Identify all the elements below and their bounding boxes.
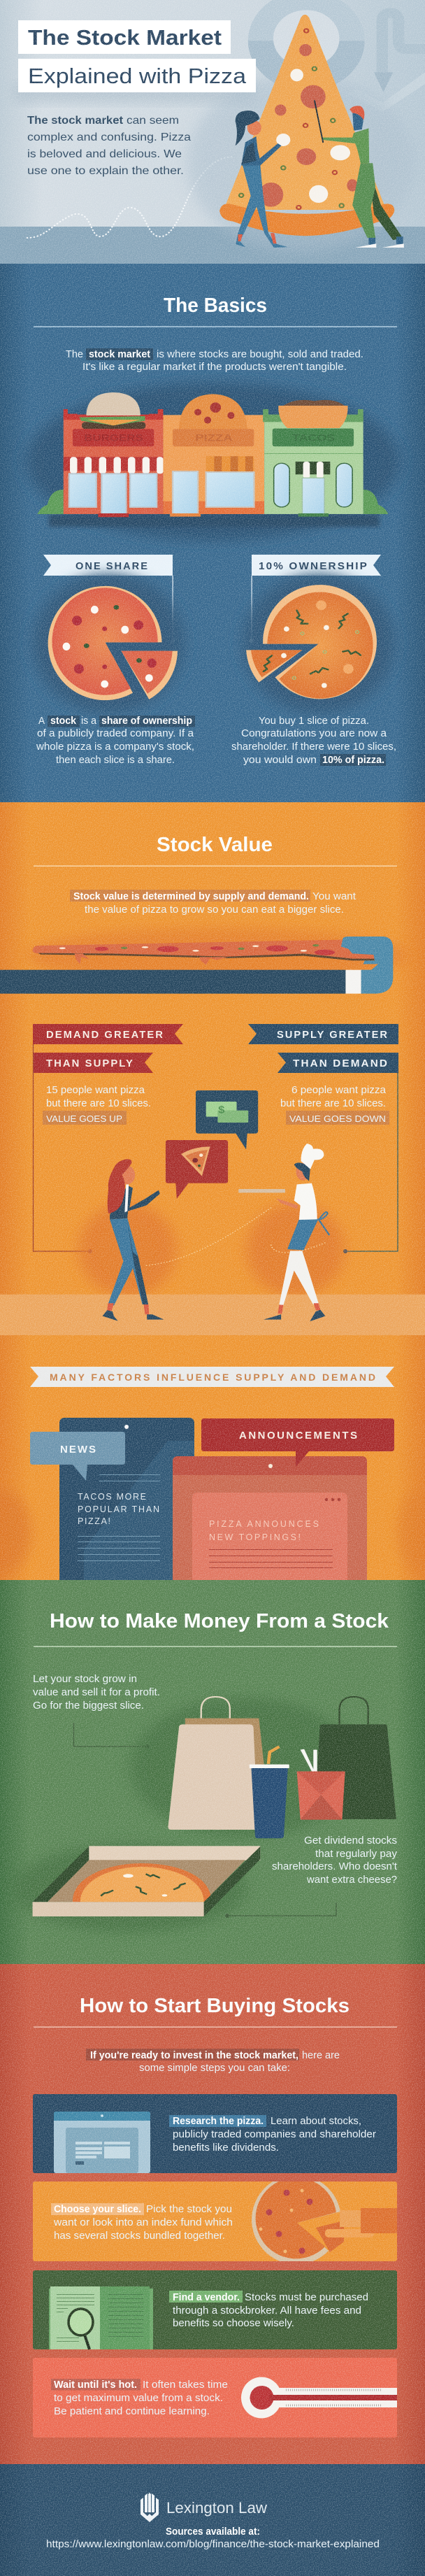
icon: browser xyxy=(54,2112,150,2173)
intro: stock market definition: The xyxy=(66,349,83,360)
icon: thermometer xyxy=(241,2377,397,2419)
banner: supply greater than demand xyxy=(248,1024,398,1253)
intro: steps xyxy=(86,2049,340,2074)
headline: pizza toppings: PIZZA ANNOUNCES xyxy=(209,1519,319,1529)
icon: pizza and hand xyxy=(252,2182,397,2261)
banner: many factors xyxy=(30,1367,394,1387)
text: value goes down: 6 people want pizza xyxy=(291,1085,387,1096)
heading: how to start buying: How to Start Buying Stocks xyxy=(80,1995,350,2017)
illustration: pepperoni pizza with slice out xyxy=(33,574,185,713)
banner: one share xyxy=(43,555,175,643)
intro: steps: If you're ready to invest in the stock market, xyxy=(90,2050,298,2061)
intro: stock market definition: is where stocks are bought, sold and traded. xyxy=(157,349,363,360)
connector: dividend xyxy=(225,1902,336,1918)
panel: footer xyxy=(0,2464,425,2576)
text: sell for profit: value and sell it for a profit. xyxy=(33,1687,160,1698)
intro text: is beloved and delicious. We xyxy=(27,148,182,160)
text: value goes up: 15 people want pizza xyxy=(46,1085,145,1096)
text: ownership explanation: Congratulations you are now a xyxy=(241,728,387,739)
text: value goes up: VALUE GOES UP xyxy=(46,1113,122,1124)
banner: 10% ownership xyxy=(250,555,381,643)
icon: noodle box xyxy=(297,1749,345,1820)
intro: steps: here are xyxy=(302,2050,340,2061)
text: sell for profit: Go for the biggest slice. xyxy=(33,1700,144,1712)
panel: stock value xyxy=(0,802,425,1580)
headline: tacos xyxy=(78,1492,159,1526)
step card: choose xyxy=(33,2182,397,2261)
sources xyxy=(46,2526,380,2550)
store: pizza: PIZZA xyxy=(195,433,233,443)
logo: lexington law: Lexington Law xyxy=(166,2499,267,2517)
step card: vendor: Find a vendor. xyxy=(173,2292,240,2303)
text: ownership explanation: 10% of pizza. xyxy=(322,755,384,766)
intro text: The stock market xyxy=(27,115,124,127)
banner: demand greater than supply: THAN SUPPLY xyxy=(46,1058,134,1069)
bubble: announcements: ANNOUNCEMENTS xyxy=(239,1430,357,1442)
panel: how to make money xyxy=(0,1580,425,1964)
banner: many factors: MANY FACTORS INFLUENCE SUPPLY AND DEMAND xyxy=(50,1372,375,1383)
intro: supply and demand: Stock value is determined by supply and demand. xyxy=(73,891,309,902)
bubble: news xyxy=(30,1432,125,1481)
figure: chef xyxy=(238,1144,329,1321)
step card: research: Learn about stocks, xyxy=(271,2116,361,2127)
icon: paper bag xyxy=(168,1697,264,1830)
figure: customer xyxy=(103,1159,164,1321)
store: tacos xyxy=(263,400,363,517)
text: ownership explanation: You buy 1 slice of pizza. xyxy=(259,716,369,727)
bubble: news: NEWS xyxy=(60,1444,96,1456)
step card: choose: Pick the stock you xyxy=(146,2204,232,2215)
step card: research: Research the pizza. xyxy=(173,2116,264,2127)
title: The Stock Market xyxy=(28,25,222,50)
illustration: announcement window xyxy=(173,1456,367,1580)
panel: the basics xyxy=(0,264,425,802)
text: sell for profit: Let your stock grow in xyxy=(33,1674,137,1685)
text: sell for profit xyxy=(33,1674,160,1712)
text: one share explanation: A xyxy=(38,716,45,727)
headline: tacos: TACOS MORE xyxy=(78,1492,146,1502)
title xyxy=(18,20,256,92)
text: dividend stocks: that regularly pay xyxy=(315,1849,398,1860)
icon: drink cup xyxy=(250,1746,289,1838)
headline: pizza toppings xyxy=(209,1519,319,1542)
text: ownership explanation xyxy=(231,716,396,766)
text: one share explanation: is a xyxy=(81,716,97,727)
icon: dark bag xyxy=(315,1697,396,1819)
step card: wait: Be patient and continue learning. xyxy=(54,2406,210,2417)
dotted chart line xyxy=(27,157,233,238)
intro: supply and demand: You want xyxy=(312,891,356,902)
intro text: can seem xyxy=(127,115,179,127)
step card: research: publicly traded companies and shareholder xyxy=(173,2129,376,2140)
text: one share explanation: whole pizza is a company's stock, xyxy=(36,741,194,753)
text: dividend stocks: want extra cheese? xyxy=(306,1874,397,1886)
store: burgers xyxy=(64,392,163,517)
step card: choose: has several stocks bundled together. xyxy=(54,2230,225,2242)
connector: profit xyxy=(74,1723,150,1749)
bubble: announcements xyxy=(201,1418,394,1467)
intro text xyxy=(27,115,191,177)
illustration: arm holding thin pizza slice xyxy=(0,928,407,994)
banner: one share: ONE SHARE xyxy=(75,561,149,572)
intro: stock market definition: It's like a regular market if the products weren't tangible. xyxy=(82,362,347,373)
illustration: takeout bags and drink xyxy=(130,1697,396,1838)
text: one share explanation: stock xyxy=(50,716,77,727)
logo: lexington law xyxy=(141,2493,267,2522)
store: tacos: TACOS xyxy=(292,433,335,443)
step card: vendor: Stocks must be purchased xyxy=(245,2292,368,2303)
figure: man with pointer xyxy=(315,100,404,248)
headline: tacos: PIZZA! xyxy=(78,1516,110,1526)
illustration: news phone xyxy=(59,1418,194,1580)
intro: supply and demand xyxy=(70,890,356,916)
text: one share explanation: of a publicly traded company. If a xyxy=(37,728,194,739)
heading: the basics: The Basics xyxy=(164,294,267,317)
step card: choose: Choose your slice. xyxy=(54,2204,141,2215)
headline: tacos: POPULAR THAN xyxy=(78,1504,159,1514)
text: ownership explanation: shareholder. If there were 10 slices, xyxy=(231,741,396,753)
text: one share explanation xyxy=(36,716,195,766)
step card: wait: Wait until it's hot. xyxy=(54,2379,137,2391)
panel: how to start buying xyxy=(0,1964,425,2464)
text: value goes down: but there are 10 slices. xyxy=(280,1098,386,1109)
step card: wait: It often takes time xyxy=(143,2379,228,2391)
text: dividend stocks: shareholders. Who doesn't xyxy=(272,1861,397,1872)
bubble: money xyxy=(196,1090,258,1149)
background chart icon xyxy=(248,0,425,112)
text: value goes down xyxy=(280,1085,389,1125)
text: one share explanation: share of ownership xyxy=(101,716,192,727)
icon: giant pizza slice xyxy=(187,15,415,252)
step card: vendor: through a stockbroker. All have fees and xyxy=(173,2305,361,2317)
intro: steps: some simple steps you can take: xyxy=(139,2063,290,2074)
store: pizza xyxy=(163,394,264,517)
step card: research: benefits like dividends. xyxy=(173,2142,279,2154)
heading: stock value: Stock Value xyxy=(157,834,273,856)
title: Explained with Pizza xyxy=(28,64,247,88)
heading: how to make money: How to Make Money From a Stock xyxy=(50,1610,389,1632)
illustration: storefronts xyxy=(26,383,400,541)
text: ownership explanation: you would own xyxy=(243,755,317,766)
banner: 10% ownership: 10% OWNERSHIP xyxy=(259,561,368,572)
intro text: use one to explain the other. xyxy=(27,165,184,177)
banner: supply greater than demand: THAN DEMAND xyxy=(293,1058,389,1069)
text: dividend stocks xyxy=(272,1835,398,1886)
banner: demand greater than supply: DEMAND GREATER xyxy=(46,1030,164,1041)
figure: woman xyxy=(236,111,288,248)
illustration: pizza box xyxy=(13,1844,260,1933)
bubble: money: $ xyxy=(218,1105,225,1116)
text: value goes up: but there are 10 slices. xyxy=(46,1098,151,1109)
intro: supply and demand: the value of pizza to grow so you can eat a bigger slice. xyxy=(85,904,344,916)
sources: Sources available at: xyxy=(166,2526,260,2538)
illustration: orange pizza with slice out xyxy=(243,574,394,713)
step card: choose: want or look into an index fund which xyxy=(53,2217,233,2228)
headline: pizza toppings: NEW TOPPINGS! xyxy=(209,1532,301,1542)
step card: wait: to get maximum value from a stock. xyxy=(54,2393,223,2404)
text: value goes up xyxy=(43,1085,151,1125)
step card: wait xyxy=(33,2358,397,2438)
intro: stock market definition xyxy=(66,348,363,373)
illustration: customer and chef scene xyxy=(0,1090,425,1335)
bubble: pizza xyxy=(166,1140,228,1199)
banner: supply greater than demand: SUPPLY GREATER xyxy=(277,1030,389,1041)
panel: hero xyxy=(0,0,425,264)
text: dividend stocks: Get dividend stocks xyxy=(304,1835,397,1846)
intro text: complex and confusing. Pizza xyxy=(27,131,191,143)
step card: research xyxy=(33,2094,397,2173)
sources: https://www.lexingtonlaw.com/blog/finance/the-stock-market-explained xyxy=(46,2539,380,2550)
step card: vendor xyxy=(33,2270,397,2349)
store: burgers: BURGERS xyxy=(84,433,143,443)
step card: vendor: benefits so choose wisely. xyxy=(173,2318,294,2329)
text: value goes down: VALUE GOES DOWN xyxy=(289,1113,386,1124)
banner: demand greater than supply xyxy=(33,1024,183,1253)
text: one share explanation: then each slice is a share. xyxy=(56,755,175,766)
icon: book and magnifier xyxy=(49,2286,153,2349)
intro: stock market definition: stock market xyxy=(89,349,150,360)
